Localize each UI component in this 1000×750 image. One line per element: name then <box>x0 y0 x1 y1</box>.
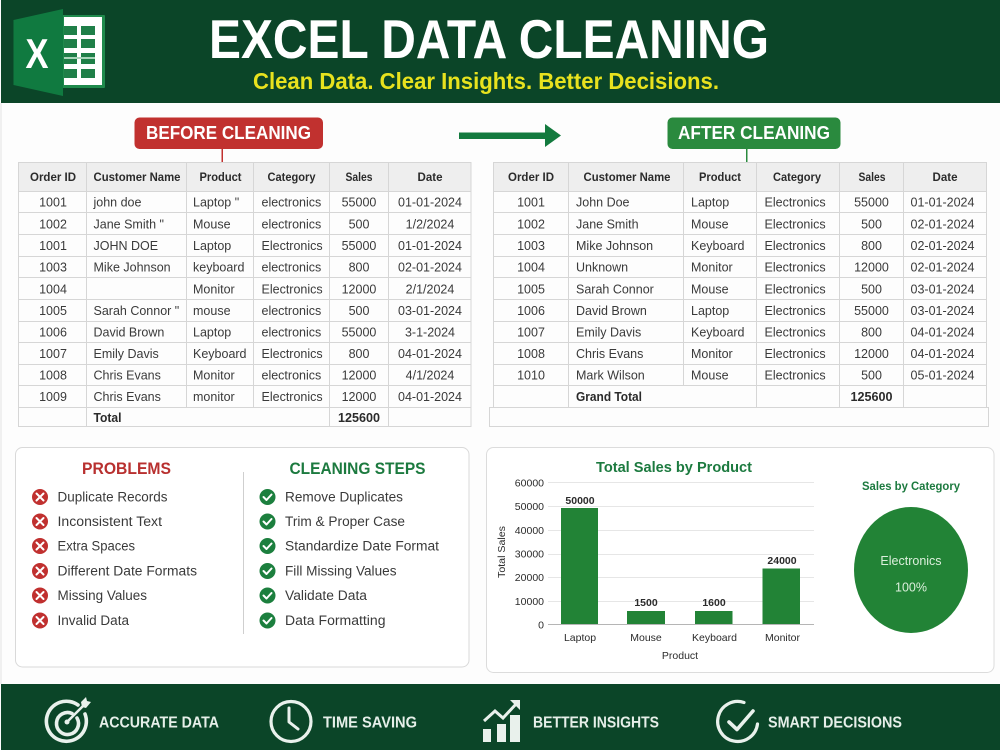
row 3: Keyboard <box>691 239 745 253</box>
bar: monitor: 24000 <box>767 555 797 567</box>
icon: excel logo: X <box>26 30 48 77</box>
row 3: JOHN DOE <box>94 239 158 253</box>
row 3: 800 <box>861 239 882 253</box>
row 2 <box>39 218 454 232</box>
row 1: John Doe <box>576 196 630 210</box>
bar: laptop <box>561 495 598 644</box>
row 5 <box>517 282 975 296</box>
row 7: electronics <box>262 326 321 340</box>
grand total row <box>576 390 893 404</box>
row 4: Electronics <box>764 260 826 274</box>
row 4: 800 <box>349 260 369 274</box>
row 1: 01-01-2024 <box>911 196 975 210</box>
panel: charts <box>486 448 994 672</box>
row 6: electronics <box>262 304 321 318</box>
bar: monitor <box>762 555 801 644</box>
row 4: 02-01-2024 <box>398 260 462 274</box>
row 6: 03-01-2024 <box>911 304 975 318</box>
row 5: 500 <box>861 282 882 296</box>
row 9: Chris Evans <box>94 368 161 382</box>
row 9: Mark Wilson <box>576 368 645 382</box>
row 4: 1004 <box>517 260 545 274</box>
row 6: 55000 <box>854 304 889 318</box>
row 9: 12000 <box>342 368 376 382</box>
header row: Order ID <box>30 172 76 184</box>
header row: Product <box>699 172 741 184</box>
row 1: 1001 <box>39 196 67 210</box>
row 3: 1001 <box>39 239 67 253</box>
row 7: 1007 <box>517 326 545 340</box>
row 1: Electronics <box>764 196 826 210</box>
row 7: David Brown <box>94 326 164 340</box>
row 10: 12000 <box>342 390 376 404</box>
problem: different date formats: Different Date Formats <box>58 564 197 578</box>
header row: Sales <box>858 172 886 184</box>
row 8: Emily Davis <box>94 347 159 361</box>
row 4: 1003 <box>39 260 67 274</box>
header row: Product <box>200 172 242 184</box>
row 4 <box>39 260 462 274</box>
row 6: 1005 <box>39 304 67 318</box>
row 9 <box>517 368 975 382</box>
problem: inconsistent text: Inconsistent Text <box>58 514 162 529</box>
row 8: 04-01-2024 <box>911 347 975 361</box>
row 8: 04-01-2024 <box>398 347 462 361</box>
row 7 <box>517 326 975 340</box>
row 5: 2/1/2024 <box>406 282 454 296</box>
panel: problems and cleaning steps <box>16 448 469 667</box>
row 3: Laptop <box>193 239 231 253</box>
row 8: 1008 <box>517 347 545 361</box>
heading: cleaning steps: CLEANING STEPS <box>290 460 426 478</box>
bar: keyboard: Keyboard <box>692 632 737 644</box>
subtitle: Clean Data. Clear Insights. Better Decisions. <box>253 68 719 94</box>
row 2: electronics <box>262 218 321 232</box>
header row <box>508 172 958 184</box>
row 6: Laptop <box>691 304 729 318</box>
row 3: 1003 <box>517 239 545 253</box>
row 6 <box>39 304 462 318</box>
row 5: Sarah Connor <box>576 282 654 296</box>
row 6: David Brown <box>576 304 647 318</box>
problem: extra spaces: Extra Spaces <box>58 538 135 554</box>
row 6: mouse <box>193 304 231 318</box>
row 6: 1006 <box>517 304 545 318</box>
header row: Date <box>932 172 958 184</box>
header row: Order ID <box>508 172 554 184</box>
icon: excel logo <box>14 9 105 96</box>
bar: mouse: Mouse <box>630 632 662 644</box>
badge: before cleaning: BEFORE CLEANING <box>146 123 311 143</box>
heading: problems: PROBLEMS <box>82 460 171 478</box>
badge: after cleaning <box>668 118 840 162</box>
y axis labels: 10000 <box>515 596 544 608</box>
row 8: 800 <box>349 347 369 361</box>
row 5 <box>39 282 454 296</box>
row 5: Mouse <box>691 282 729 296</box>
row 1 <box>517 196 975 210</box>
row 7 <box>39 326 455 340</box>
step: validate data <box>260 588 367 604</box>
row 8: Keyboard <box>193 347 247 361</box>
row 8: Chris Evans <box>576 347 643 361</box>
row 9: 05-01-2024 <box>911 368 975 382</box>
row 6: 500 <box>349 304 369 318</box>
step: remove duplicates: Remove Duplicates <box>285 490 403 504</box>
row 2: 1/2/2024 <box>406 218 454 232</box>
row 2: 1002 <box>39 218 67 232</box>
row 1: Laptop <box>691 196 729 210</box>
row 7: 3-1-2024 <box>405 326 455 340</box>
total row: 125600 <box>338 411 380 425</box>
row 5: 1004 <box>39 282 67 296</box>
pie chart: sales by category <box>854 507 968 633</box>
step: trim and proper case: Trim & Proper Case <box>285 514 405 529</box>
bar: monitor: Monitor <box>765 632 801 644</box>
row 2: Jane Smith " <box>94 218 164 232</box>
footer banner <box>1 684 1000 750</box>
row 9: electronics <box>262 368 321 382</box>
row 1: 55000 <box>342 196 376 210</box>
grand total row: Grand Total <box>576 390 642 404</box>
step: standardize date format: Standardize Date Format <box>285 538 439 554</box>
row 6: Sarah Connor " <box>94 304 179 318</box>
row 2: 02-01-2024 <box>911 218 975 232</box>
row 1 <box>39 196 462 210</box>
y axis labels: 30000 <box>515 548 544 560</box>
icon: clock <box>271 702 311 742</box>
row 7: 1006 <box>39 326 67 340</box>
x axis title: Product <box>662 650 698 662</box>
row 4: Monitor <box>691 260 733 274</box>
table: after cleaning <box>490 162 988 426</box>
bar: laptop: 50000 <box>565 495 595 507</box>
row 1: 1001 <box>517 196 545 210</box>
row 10: monitor <box>193 390 235 404</box>
row 2: 500 <box>861 218 882 232</box>
step: data formatting: Data Formatting <box>285 613 386 628</box>
pie chart: sales by category: 100% <box>895 580 927 594</box>
row 8: 12000 <box>854 347 889 361</box>
row 8: Monitor <box>691 347 733 361</box>
row 4: keyboard <box>193 260 244 274</box>
header row: Date <box>418 172 442 184</box>
row 2: 1002 <box>517 218 545 232</box>
row 8: 1007 <box>39 347 67 361</box>
label: accurate data: ACCURATE DATA <box>99 714 219 732</box>
problem: extra spaces <box>32 538 135 554</box>
header row: Sales <box>346 172 372 184</box>
row 4 <box>517 260 975 274</box>
row 1: john doe <box>92 196 142 210</box>
row 1: electronics <box>262 196 321 210</box>
row 5: Electronics <box>262 282 323 296</box>
problem: missing values: Missing Values <box>58 588 147 603</box>
row 8: Electronics <box>262 347 323 361</box>
row 1: Laptop " <box>193 196 239 210</box>
row 7: Laptop <box>193 326 231 340</box>
y axis labels: 50000 <box>515 501 544 513</box>
chart title: total sales by product: Total Sales by Product <box>596 460 752 476</box>
row 8: Electronics <box>764 347 826 361</box>
row 6: Electronics <box>764 304 826 318</box>
icon: rising bar chart <box>483 700 520 742</box>
row 10: Electronics <box>262 390 323 404</box>
row 9: 4/1/2024 <box>406 368 454 382</box>
row 5: Monitor <box>193 282 235 296</box>
row 3 <box>517 239 975 253</box>
header row: Customer Name <box>94 172 180 184</box>
row 7: Emily Davis <box>576 326 641 340</box>
row 9: Monitor <box>193 368 235 382</box>
row 7: 55000 <box>342 326 376 340</box>
row 1: 55000 <box>854 196 889 210</box>
y axis title: Total Sales <box>496 526 508 578</box>
pie chart: sales by category: Electronics <box>880 554 942 568</box>
row 4: 12000 <box>854 260 889 274</box>
row 1: 01-01-2024 <box>398 196 462 210</box>
icon: check circle <box>718 701 758 741</box>
label: time saving: TIME SAVING <box>323 714 417 732</box>
row 9: 1008 <box>39 368 67 382</box>
y axis labels: 60000 <box>515 478 544 490</box>
step: fill missing values: Fill Missing Values <box>285 564 397 578</box>
row 5: 12000 <box>342 282 376 296</box>
bar: keyboard <box>692 597 737 644</box>
row 10: 04-01-2024 <box>398 390 462 404</box>
row 9: 500 <box>861 368 882 382</box>
row 6: 03-01-2024 <box>398 304 462 318</box>
row 3: 02-01-2024 <box>911 239 975 253</box>
total row: Total <box>94 411 122 425</box>
row 2 <box>517 218 975 232</box>
badge: before cleaning <box>134 118 323 162</box>
row 3 <box>39 239 462 253</box>
y axis labels: 0 <box>538 620 544 632</box>
icon: target <box>46 697 91 741</box>
total row <box>94 411 380 425</box>
bar: laptop: Laptop <box>564 632 596 644</box>
bar: mouse <box>627 597 665 644</box>
row 7: 04-01-2024 <box>911 326 975 340</box>
row 7: Electronics <box>764 326 826 340</box>
row 3: Mike Johnson <box>576 239 653 253</box>
header row: Customer Name <box>584 172 670 184</box>
problem: invalid data: Invalid Data <box>58 613 129 628</box>
row 3: 55000 <box>342 239 376 253</box>
problem: duplicate records: Duplicate Records <box>58 490 168 504</box>
problem: invalid data <box>32 612 129 628</box>
header row <box>30 172 442 184</box>
row 8 <box>39 347 462 361</box>
row 9 <box>39 368 454 382</box>
row 2: 500 <box>349 218 369 232</box>
title: EXCEL DATA CLEANING <box>209 8 769 70</box>
badge: after cleaning: AFTER CLEANING <box>678 123 830 143</box>
bar: keyboard: 1600 <box>702 597 726 609</box>
row 3: Electronics <box>262 239 323 253</box>
row 3: 01-01-2024 <box>398 239 462 253</box>
row 4: 02-01-2024 <box>911 260 975 274</box>
row 9: Mouse <box>691 368 729 382</box>
header row: Category <box>268 172 316 184</box>
row 9: Electronics <box>764 368 826 382</box>
row 2: Jane Smith <box>576 218 639 232</box>
y axis labels: 20000 <box>515 572 544 584</box>
chart title: sales by category: Sales by Category <box>862 479 960 493</box>
grand total row: 125600 <box>850 390 893 404</box>
row 10: Chris Evans <box>94 390 161 404</box>
row 5: 03-01-2024 <box>911 282 975 296</box>
step: validate data: Validate Data <box>285 588 367 603</box>
row 2: Mouse <box>193 218 231 232</box>
row 6 <box>517 304 975 318</box>
bar: mouse: 1500 <box>634 597 658 609</box>
row 2: Electronics <box>764 218 826 232</box>
row 8 <box>517 347 975 361</box>
row 7: Keyboard <box>691 326 745 340</box>
row 5: 1005 <box>517 282 545 296</box>
row 10: 1009 <box>39 390 67 404</box>
label: better insights: BETTER INSIGHTS <box>533 714 659 732</box>
header banner <box>1 0 1000 103</box>
row 10 <box>39 390 462 404</box>
row 4: Mike Johnson <box>94 260 171 274</box>
y axis labels <box>515 478 544 632</box>
row 9: 1010 <box>517 368 545 382</box>
row 7: 800 <box>861 326 882 340</box>
row 3: Electronics <box>764 239 826 253</box>
arrow: before to after <box>459 124 561 147</box>
table: before cleaning <box>18 162 471 426</box>
label: smart decisions: SMART DECISIONS <box>768 714 902 732</box>
row 4: electronics <box>262 260 321 274</box>
row 4: Unknown <box>576 260 628 274</box>
row 2: Mouse <box>691 218 729 232</box>
header row: Category <box>773 172 822 184</box>
bar chart: total sales by product <box>496 478 814 662</box>
y axis labels: 40000 <box>515 525 544 537</box>
row 5: Electronics <box>764 282 826 296</box>
